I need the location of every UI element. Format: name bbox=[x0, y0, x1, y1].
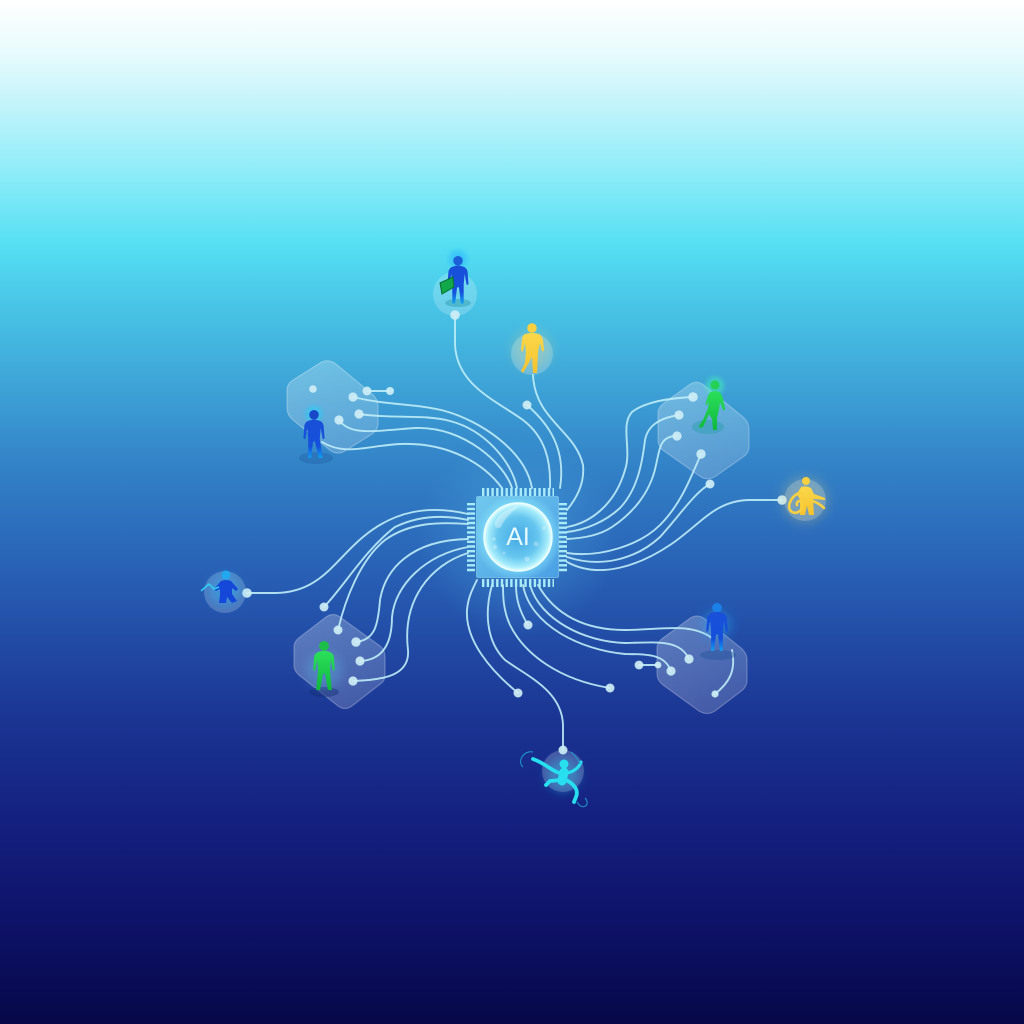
central glow bbox=[418, 437, 618, 637]
orb bbox=[484, 503, 552, 571]
icon: thin cords bbox=[521, 752, 587, 807]
figure: green person on lower-left hexagon bbox=[306, 641, 342, 697]
icon: green circuit board bbox=[440, 277, 454, 294]
connection lines: top-left group bbox=[322, 391, 532, 488]
figure: yellow person with ribbons bbox=[781, 476, 829, 524]
connection lines: top group bbox=[455, 315, 583, 510]
icon: cyan line bbox=[201, 584, 219, 591]
figure: blue person with green board bbox=[440, 250, 471, 307]
figure: blue crouching person bbox=[201, 570, 240, 605]
chip pins bbox=[471, 492, 563, 583]
panel: lower-right hexagon bbox=[657, 616, 747, 714]
connector dots bbox=[242, 310, 787, 754]
orb glow bbox=[474, 493, 562, 581]
connection lines: bottom group bbox=[467, 580, 733, 750]
chip body bbox=[476, 496, 558, 578]
figure: blue person on top-left hexagon bbox=[299, 406, 333, 464]
figure: cyan tumbling person bbox=[521, 752, 587, 807]
orb sparkles bbox=[492, 526, 546, 562]
AI chip bbox=[471, 492, 563, 583]
figure: yellow person bbox=[512, 323, 552, 373]
figure: green person on right hexagon bbox=[692, 377, 725, 434]
label: AI: AI bbox=[506, 523, 530, 551]
panel: lower-left hexagon bbox=[294, 614, 385, 708]
figure: blue person on lower-right hexagon bbox=[700, 603, 736, 660]
connection lines: left group bbox=[247, 510, 468, 681]
node bubbles bbox=[204, 272, 826, 792]
icon: yellow ribbons bbox=[789, 493, 824, 513]
panel: top-left hexagon bbox=[287, 361, 378, 453]
orb highlight bbox=[495, 506, 520, 528]
panel: right hexagon bbox=[658, 382, 749, 479]
connection lines: right group bbox=[567, 397, 782, 570]
